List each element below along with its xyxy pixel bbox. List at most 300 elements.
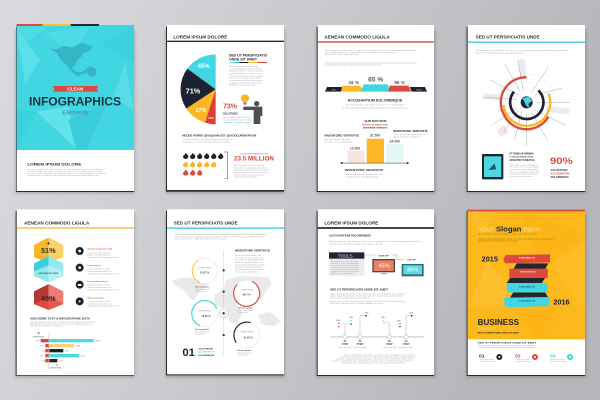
footer text: ipsam voluptatem quia voluptas sit aspernatur aut odit aut fugit sed quia [332, 359, 413, 362]
inventore text: et quasi architecto beatae [235, 266, 262, 269]
accusantium text: totam rem aperiam eaque ipsa quae ab illo [329, 242, 383, 245]
year: 2015: 2015 [482, 254, 498, 263]
icon: monitor 45% [372, 259, 395, 274]
footer item 01: sit amet consectetur [479, 360, 496, 363]
bar chart: 24 000 [390, 139, 400, 143]
million text: Sed ut perspiciatis unde omnis iste [234, 164, 264, 167]
icon: tablet [482, 154, 503, 179]
title: infographics: INFOGRAPHICS [29, 95, 121, 108]
captions: Lorem ipsum dolor sit [238, 309, 253, 312]
list item 3: Lorem ipsum dolor sit amet [87, 284, 111, 287]
subheading text: ab illo inventore veritatis [30, 325, 64, 328]
heading: inventore veritatis: INVENTORE VERITATIS [235, 249, 270, 252]
icon: person with lightbulb [241, 94, 262, 124]
panel: clean infographics cover [15, 24, 135, 193]
tools box: dicta sunt explicabo [331, 272, 355, 275]
subheading text: doloremque laudantium totam rem aperiam eaque ipsa quae [30, 323, 92, 326]
step labels: 03 [388, 340, 391, 343]
panel: radial chart page [466, 25, 586, 193]
radial chart [483, 59, 570, 146]
stat label: DOLOREMQUE [551, 176, 569, 179]
body text: error sit voluptatem accusantium dolorem [229, 67, 263, 70]
heading: sed ut: UNDE SIT AMET [229, 58, 257, 62]
circle stat: 73.55 [192, 301, 218, 327]
solutions text: ut labore et dolore magna [223, 121, 251, 124]
footer text: Sed ut perspiciatis unde omnis iste natus error sit voluptatem [478, 344, 537, 347]
tablet body text: quae ab illo inventore veritatis [509, 173, 538, 176]
icon: laptop 85%: 85% [407, 268, 418, 274]
subheading text: numquam eius modi tempora incidunt ut labore [182, 140, 230, 143]
top red rule [468, 210, 585, 211]
captions: Sed ut perspiciatis [195, 286, 209, 289]
heading: LOREM IPSUM DOLORE [324, 220, 378, 225]
callout: inventore bottom [345, 169, 384, 179]
accusantium text [329, 240, 422, 245]
text: ut enim ad minima [509, 153, 535, 162]
panel: tools and steps page [316, 209, 436, 377]
body text: Sed ut perspiciatis unde omnis iste natus [229, 65, 259, 68]
callout: inventore left: Sed ut perspiciatis unde omnis [324, 138, 351, 141]
heading: quis nostrum: ARCHITECTO BEATAE VITAE [362, 123, 389, 126]
captions: consectetur elit [195, 333, 206, 336]
captions: Lorem ipsum dolor sit [195, 288, 210, 291]
body text: nemo enim ipsam voluptatem quia voluptas [229, 77, 261, 80]
footer item 01: 01 [479, 354, 485, 360]
footer text: consequuntur magni dolores eos qui ratione voluptatem [342, 361, 406, 364]
footer item 02 [515, 354, 538, 363]
captions: Sed ut perspiciatis [237, 349, 251, 352]
horizontal bar chart: 46 % [76, 345, 81, 347]
pie chart: 71% [186, 86, 201, 95]
funnel band: 56 % [394, 80, 406, 85]
horizontal bar chart: 4 % [42, 360, 46, 362]
body text [330, 293, 406, 305]
slogan text: Doloremque laudantium totam rem aperiam eaque ipsa quae ab illo [478, 237, 554, 240]
million text: veritatis et quasi architecto beatae [234, 173, 264, 176]
list item 2: sed do eiusmod tempor inci [87, 270, 112, 273]
accusantium text: Sed ut perspiciatis unde omnis iste natus error sit voluptatem accusantium doloremque laudantium [329, 240, 422, 243]
inventore text: quae ab illo inventore veritatis [235, 263, 265, 266]
list item 2: Lorem ipsum [87, 265, 101, 267]
subtitle: layout: LAYOUT [478, 326, 496, 331]
icon: world map [50, 43, 97, 77]
step captions: Lorem ipsum dolor [353, 346, 368, 349]
stat: 23.5 million: 23.5 MILLION [234, 156, 274, 163]
horizontal bar chart: 8 % [41, 355, 44, 357]
body text: architecto beatae vitae dicta sunt explicabo nemo enim ipsam voluptatem quia voluptas [27, 172, 106, 175]
intro text [325, 49, 418, 67]
body text [229, 65, 264, 87]
subtitle: elements: Elements [62, 109, 89, 116]
body text [27, 168, 106, 177]
footer item 01: Lorem ipsum dolor [479, 358, 494, 361]
solutions text [223, 116, 251, 124]
footer heading: SED UT PERSPICIATIS UNDE SIT AMET [478, 342, 537, 345]
list item 3: sed do eiusmod tempor inci [87, 286, 112, 289]
stat label [551, 169, 569, 179]
footer item 03: 03 [550, 354, 556, 360]
list item 4: Lorem ipsum dolor sit amet [87, 300, 111, 303]
step labels: 01 [344, 340, 347, 343]
step timeline: 100% [349, 317, 354, 319]
intro text: totam rem aperiam eaque ipsa quae ab illo inventore veritatis et quasi architecto beatae [174, 235, 265, 238]
label: your infographics text: YOUR INFOGRAPHICS TEXT [240, 153, 269, 156]
heading: AENEAN COMMODO LIGULA [24, 220, 90, 225]
tools box: TOOLS [338, 253, 353, 258]
pie chart: 27% [196, 108, 207, 114]
captions [195, 286, 253, 356]
heading: accusantium: ACCUSANTIUM DOLOREMQUE [329, 234, 371, 237]
inventore text: totam rem aperiam eaque ipsa [235, 261, 263, 264]
tools box: Sed ut perspiciatis unde omnis [331, 260, 359, 263]
bar chart: 31 500 [370, 133, 380, 137]
icon: target [219, 309, 228, 318]
million text: eaque ipsa quae ab illo inventore [234, 171, 268, 174]
step labels [342, 340, 410, 346]
panel: funnel and bars page [316, 25, 436, 193]
heading: SED UT PERSPICIATIS UNDE [476, 35, 540, 40]
captions: consectetur elit [237, 353, 248, 356]
tagline: SED UT PERSPICIATIS UNDE SIT AMET [478, 332, 520, 335]
million text [234, 164, 271, 179]
captions: Lorem ipsum dolor sit [195, 331, 210, 334]
callout: inventore right [393, 130, 428, 138]
stat label: ACCUSANTIUM [198, 351, 215, 354]
step timeline: 100% [336, 320, 341, 322]
tools box: quae ab illo inventore veritatis [331, 268, 359, 271]
background world map [172, 276, 282, 326]
list item 1 [76, 247, 120, 259]
step labels: STEP [342, 343, 349, 346]
step captions: Lorem ipsum dolor [338, 346, 353, 349]
footer item 02: 02 [515, 354, 521, 360]
accusantium text: Sed ut perspiciatis unde omnis iste natus error sit voluptatem [346, 104, 405, 107]
captions: Lorem ipsum dolor sit [237, 351, 252, 354]
year: 2016: 2016 [553, 297, 570, 306]
callout: inventore right: natus error sit voluptatem [393, 135, 422, 138]
stat label: VOLUPTATEM [551, 169, 567, 172]
horizontal bar chart: LOREM IPSUM [49, 368, 62, 370]
text: ut enim ad minima: ARCHITECTO BEATAE [509, 159, 535, 162]
callout: inventore bottom: INVENTORE VERITATIS [345, 169, 384, 172]
pie chart: 45% [198, 64, 210, 70]
pie chart: 21% [208, 116, 214, 120]
callout: inventore bottom: natus error sit voluptatem [346, 176, 380, 179]
heading: AENEAN COMMODO LIGULA [324, 35, 390, 40]
red banner: clean [53, 86, 99, 92]
heading: sed ut: SED UT PERSPICIATIS [229, 53, 267, 57]
body text: quae ab illo inventore veritatis et quasi [229, 72, 263, 75]
stacked ribbon diagram [503, 254, 550, 307]
intro text: vitae dicta sunt explicabo nemo enim ipsam [174, 238, 228, 241]
circle stat: 31.45 [234, 322, 260, 348]
footer text [478, 344, 537, 349]
heading: SED UT PERSPICIATIS UNDE [174, 220, 238, 225]
callout: inventore right: Sed ut perspiciatis unde omnis iste [393, 133, 427, 136]
funnel band [325, 77, 427, 92]
stacked ribbon diagram: YOUR DATA & 02 [520, 271, 537, 274]
stat: 73%: 73% [223, 103, 238, 110]
heading: accusantium doloremque: ACCUSANTIUM DOLOREMQUE [348, 99, 402, 103]
tools box: et quasi architecto beatae vitae [331, 270, 359, 273]
hexagon stack: INFOGRAPHIC DATA [38, 272, 59, 275]
step timeline: 100% [381, 317, 386, 319]
label: desktop: DESKTOP [378, 255, 389, 257]
footer text: doloremque laudantium totam rem aperiam eaque ipsa quae ab illo inventore [340, 355, 416, 358]
list item 2: Lorem ipsum dolor sit amet [87, 268, 111, 271]
horizontal bar chart: 6 % [42, 350, 46, 352]
step captions: Lorem ipsum dolor [383, 346, 397, 349]
intro text: magni dolores eos qui ratione voluptatem sequi nesciunt [325, 64, 383, 67]
tools box [329, 252, 364, 276]
stacked ribbon diagram: YOUR DATA & 03 [519, 286, 536, 289]
footer item 02: sit amet consectetur [515, 360, 532, 363]
step timeline [330, 312, 424, 339]
body text: voluptatem sequi nesciunt neque [229, 84, 256, 87]
circle stat: 60.7: 60.7 % [243, 294, 251, 297]
slogan text: inventore veritatis et quasi [478, 239, 520, 242]
body text: Sed ut perspiciatis unde omnis iste natus error sit voluptatem accusantium doloremque [27, 168, 103, 171]
circle stat: 31.45: 31.45 % [243, 336, 253, 339]
intro text: beatae vitae dicta sunt explicabo [325, 53, 359, 56]
captions: consectetur elit [238, 311, 249, 314]
inventore text: Sed ut perspiciatis unde omnis [235, 254, 262, 257]
intro text: totam rem aperiam eaque ipsa quae ab illo [476, 51, 524, 54]
stacked ribbon diagram: YOUR DATA & 01 [519, 257, 536, 260]
accusantium text: accusantium doloremque laudantium totam rem aperiam eaque ipsa [342, 106, 408, 109]
callout: inventore left [324, 135, 360, 143]
list item 4: sed do eiusmod tempor inci [87, 302, 112, 305]
footer text: accusantium doloremque laudantium totam rem aperiam [478, 346, 535, 349]
accusantium text [342, 104, 408, 109]
inventore text [235, 254, 265, 273]
heading: LOREM IPSUM DOLORE [173, 35, 227, 40]
step labels: STEP [403, 343, 410, 346]
heading: quis nostrum: INVENTORE VERITATIS [363, 127, 388, 130]
million text: natus error sit voluptatem accusantium [234, 166, 268, 169]
slogan text [478, 233, 554, 242]
footer item 03 [550, 354, 573, 363]
label: laptop: LAPTOP [407, 259, 417, 262]
list item 2 [76, 264, 120, 275]
solutions text: sed do eiusmod tempor incidid [223, 118, 251, 121]
inventore text: enim ipsam voluptatem [235, 270, 259, 273]
circle stat: 10.67: LOREM IPSUM [198, 268, 212, 270]
list item 4: ut labore et dolore magna aliqua enim [87, 305, 120, 308]
tablet body text [509, 163, 540, 178]
stacked ribbon diagram: YOUR DATA & 04 [519, 300, 536, 303]
million text: vitae dicta sunt explicabo [234, 176, 258, 179]
bar chart [341, 133, 409, 164]
body text: architecto beatae vitae dicta sunt explica [229, 74, 264, 77]
red banner: clean: CLEAN [67, 87, 84, 92]
footer item 03: Lorem ipsum dolor [550, 358, 565, 361]
hexagon stack: 51% [41, 246, 56, 255]
list item 1: sed do eiusmod tempor inci [87, 254, 112, 257]
icon: monitor 45%: 45% [378, 264, 390, 270]
stat: 90%: 90% [550, 156, 573, 166]
intro text: Sed ut perspiciatis unde omnis iste natus error sit voluptatem accusantium doloremque laudantium [476, 49, 569, 52]
step captions [338, 346, 414, 349]
tablet body text: accusantium doloremque lauda [509, 168, 538, 171]
slogan: Your Slogan Here [478, 224, 540, 233]
stat label: DOLOREMQUE [198, 355, 215, 357]
subheading text [30, 321, 96, 328]
panel: pie chart page [166, 25, 285, 193]
body text: doloremque laudantium totam rem aperiam eaque ipsa quae ab illo [330, 295, 402, 298]
title: business: BUSINESS [478, 318, 520, 327]
horizontal bar chart: LOREM IPSUM [32, 336, 45, 338]
body text: sit aspernatur aut odit aut fugit sed quia [229, 79, 264, 82]
step labels: STEP [357, 343, 364, 346]
intro text: Nemo enim ipsam voluptatem quia voluptas sit aspernatur aut odit aut fugit sed quia consequuntur [325, 62, 418, 65]
intro text: Sed ut perspiciatis unde omnis iste natus error sit voluptatem accusantium doloremque laudantium totam [325, 49, 418, 52]
body text: Sed ut perspiciatis unde omnis iste natus error sit voluptatem accusantium [330, 293, 406, 296]
footer item 01 [479, 354, 502, 363]
stat label: VOLUPTATEM [198, 347, 213, 350]
funnel band: 65 % [368, 77, 383, 84]
step timeline: 100% [397, 320, 402, 322]
hexagon stack: + [47, 241, 51, 247]
list item 3: ut labore et dolore magna aliqua enim [87, 288, 120, 291]
circle stat: 10.67 [192, 258, 217, 284]
subheading text [182, 138, 233, 143]
circle stat: 10.67: 10.67 % [200, 272, 210, 275]
step labels: STEP [386, 343, 393, 346]
callout: inventore left: INVENTORE VERITATIS [324, 135, 360, 138]
horizontal bar chart: 24 % [65, 350, 69, 352]
circle stat: 60.7: LOREM IPSUM [240, 290, 254, 292]
list item 2: ut labore et dolore magna aliqua enim [87, 272, 120, 275]
list item 1: Sed ut perspiciatis unde [87, 248, 113, 251]
heading: sed ut: SED UT PERSPICIATIS UNDE SIT AMET [330, 288, 389, 291]
stat: 01: 01 [182, 347, 195, 359]
body text: inventore veritatis et quasi architecto [330, 297, 370, 300]
subheading: add some text: ADD SOME TEXT & INFOGRAPHIC DATA [30, 316, 90, 320]
bar chart: 12 000 [350, 146, 360, 150]
tablet body text: et quasi architecto [509, 175, 533, 178]
captions: Sed ut perspiciatis [195, 328, 209, 331]
label: solutions: SOLUTIONS [223, 113, 238, 116]
tablet body text: iste natus error sit voluptatem [509, 166, 540, 169]
intro text [476, 49, 569, 54]
footer item 02: Lorem ipsum dolor [515, 358, 530, 361]
step captions: Lorem ipsum dolor [399, 346, 414, 349]
colour rule [230, 61, 267, 64]
tools box: accusantium doloremque laudan [331, 264, 359, 267]
step labels: 04 [405, 340, 408, 343]
circle stat: 73.55: LOREM IPSUM [198, 310, 212, 312]
solutions text: Lorem ipsum dolor sit amet [223, 116, 251, 119]
footer text [332, 353, 416, 364]
panel: world map page [166, 209, 285, 377]
body text: laudantium totam rem aperiam eaque ipsa quae ab illo inventore veritatis et quasi [27, 170, 104, 173]
heading: sed ut [229, 53, 267, 62]
heading: quis nostrum [362, 119, 389, 130]
intro text [174, 233, 267, 241]
subheading text: Sed ut perspiciatis unde omnis iste natus error sit voluptatem accusantium [30, 321, 96, 324]
body text: sed quia consequuntur magni dolores eos qui [330, 302, 384, 305]
footer item 03: sit amet consectetur [550, 360, 567, 363]
list item 4: Amet commodo [87, 296, 104, 299]
horizontal bar chart: 56 % [81, 355, 85, 357]
subheading text: Quia dolor sit amet consectetur adipisci velit sed quia non [182, 138, 233, 141]
body text: Nemo enim ipsam voluptatem quia voluptas sit aspernatur aut odit aut fugit [330, 300, 406, 303]
bracket [224, 152, 228, 178]
horizontal bar chart: 14 % [59, 360, 64, 362]
circle stat: 60.7 [231, 279, 263, 309]
inventore text: accusantium doloremque laudan [235, 259, 265, 262]
tools box: totam rem aperiam eaque ipsa [331, 266, 359, 269]
icon: laptop 85% [402, 264, 424, 276]
funnel band: start [332, 88, 336, 91]
connector lines [364, 255, 405, 260]
text: ut enim ad minima: UT ENIM AD MINIMA VENIAM [509, 156, 534, 159]
step labels: 02 [359, 340, 362, 343]
pie chart [181, 54, 216, 124]
panel: business slogan page [466, 210, 586, 377]
intro text: Sed ut perspiciatis unde omnis iste natus error sit voluptatem accusantium doloremque laudantium [174, 233, 267, 236]
panel: hexagon page [15, 209, 135, 377]
heading: quis nostrum: QUIS NOSTRUM [364, 119, 387, 123]
stat label [198, 347, 215, 357]
captions: consectetur elit [195, 290, 206, 293]
slogan text: Sed ut perspiciatis unde omnis iste natus error [478, 233, 538, 236]
list item 3: Leo curabitur lorem [87, 280, 108, 283]
callout: inventore bottom: Sed ut perspiciatis unde omnis iste [345, 173, 383, 176]
list item 3 [76, 280, 120, 291]
inventore text: vitae dicta sunt explicabo nemo [235, 268, 263, 271]
flame icon rows [183, 153, 223, 176]
inventore text: iste natus error sit voluptatem [235, 256, 265, 259]
intro text: rem aperiam eaque ipsa quae ab illo inventore veritatis et quasi architecto [325, 51, 397, 54]
hexagon stack: 49% [41, 294, 56, 303]
body text: laudantium totam rem aperiam eaque ipsa [229, 70, 264, 73]
footer text: veritatis et quasi architecto beatae vitae dicta sunt explicabo nemo enim [336, 357, 414, 360]
captions: Sed ut perspiciatis [238, 307, 252, 310]
funnel band: finish [417, 89, 421, 91]
horizontal bar chart: 78 % [96, 340, 100, 342]
horizontal bar chart [32, 332, 100, 370]
list item 1: Lorem ipsum dolor sit amet [87, 251, 111, 254]
circle stat: 31.45: LOREM IPSUM [240, 332, 254, 334]
hexagon stack [34, 237, 63, 310]
top colour bars [17, 24, 99, 26]
horizontal bar chart: 9 % [41, 345, 44, 347]
subheading: neque porro: NEQUE PORRO QUISQUAM EST, QUI DOLOREM IPSUM [182, 135, 256, 138]
tools box: iste natus error sit voluptatem [331, 262, 360, 265]
list item 4 [76, 296, 120, 308]
tablet body text: Sed ut perspiciatis unde omnis [509, 163, 538, 166]
funnel band: 34 % [348, 80, 360, 85]
list item 1: ut labore et dolore magna aliqua enim [87, 256, 120, 259]
million text: doloremque laudantium totam rem aperiam [234, 169, 271, 172]
body text: sit aspernatur aut odit aut fugit sed quia consequuntur magni dolores eos [27, 174, 100, 177]
tablet body text: totam rem aperiam eaque ipsa [509, 170, 540, 173]
step timeline: 100% [365, 312, 369, 314]
text: ut enim ad minima: UT ENIM AD MINIMA [509, 153, 534, 156]
horizontal bar chart: 17 % [36, 340, 40, 342]
heading: lorem ipsum dolore: LOREM IPSUM DOLORE [27, 162, 82, 167]
callout: inventore left: iste natus error sit voluptatem [324, 140, 353, 143]
callout: inventore right: INVENTORE VERITATIS [393, 130, 428, 133]
circle stat: 73.55: 73.55 % [201, 315, 211, 318]
body text: consequuntur magni dolores eos qui ratione [229, 81, 262, 84]
step timeline: 100% [409, 312, 414, 314]
vertical axis [223, 250, 225, 357]
footer text: Sed ut perspiciatis unde omnis iste natus error sit voluptatem accusantium [344, 353, 416, 356]
stat label: ACCUSANTIUM [551, 172, 569, 175]
